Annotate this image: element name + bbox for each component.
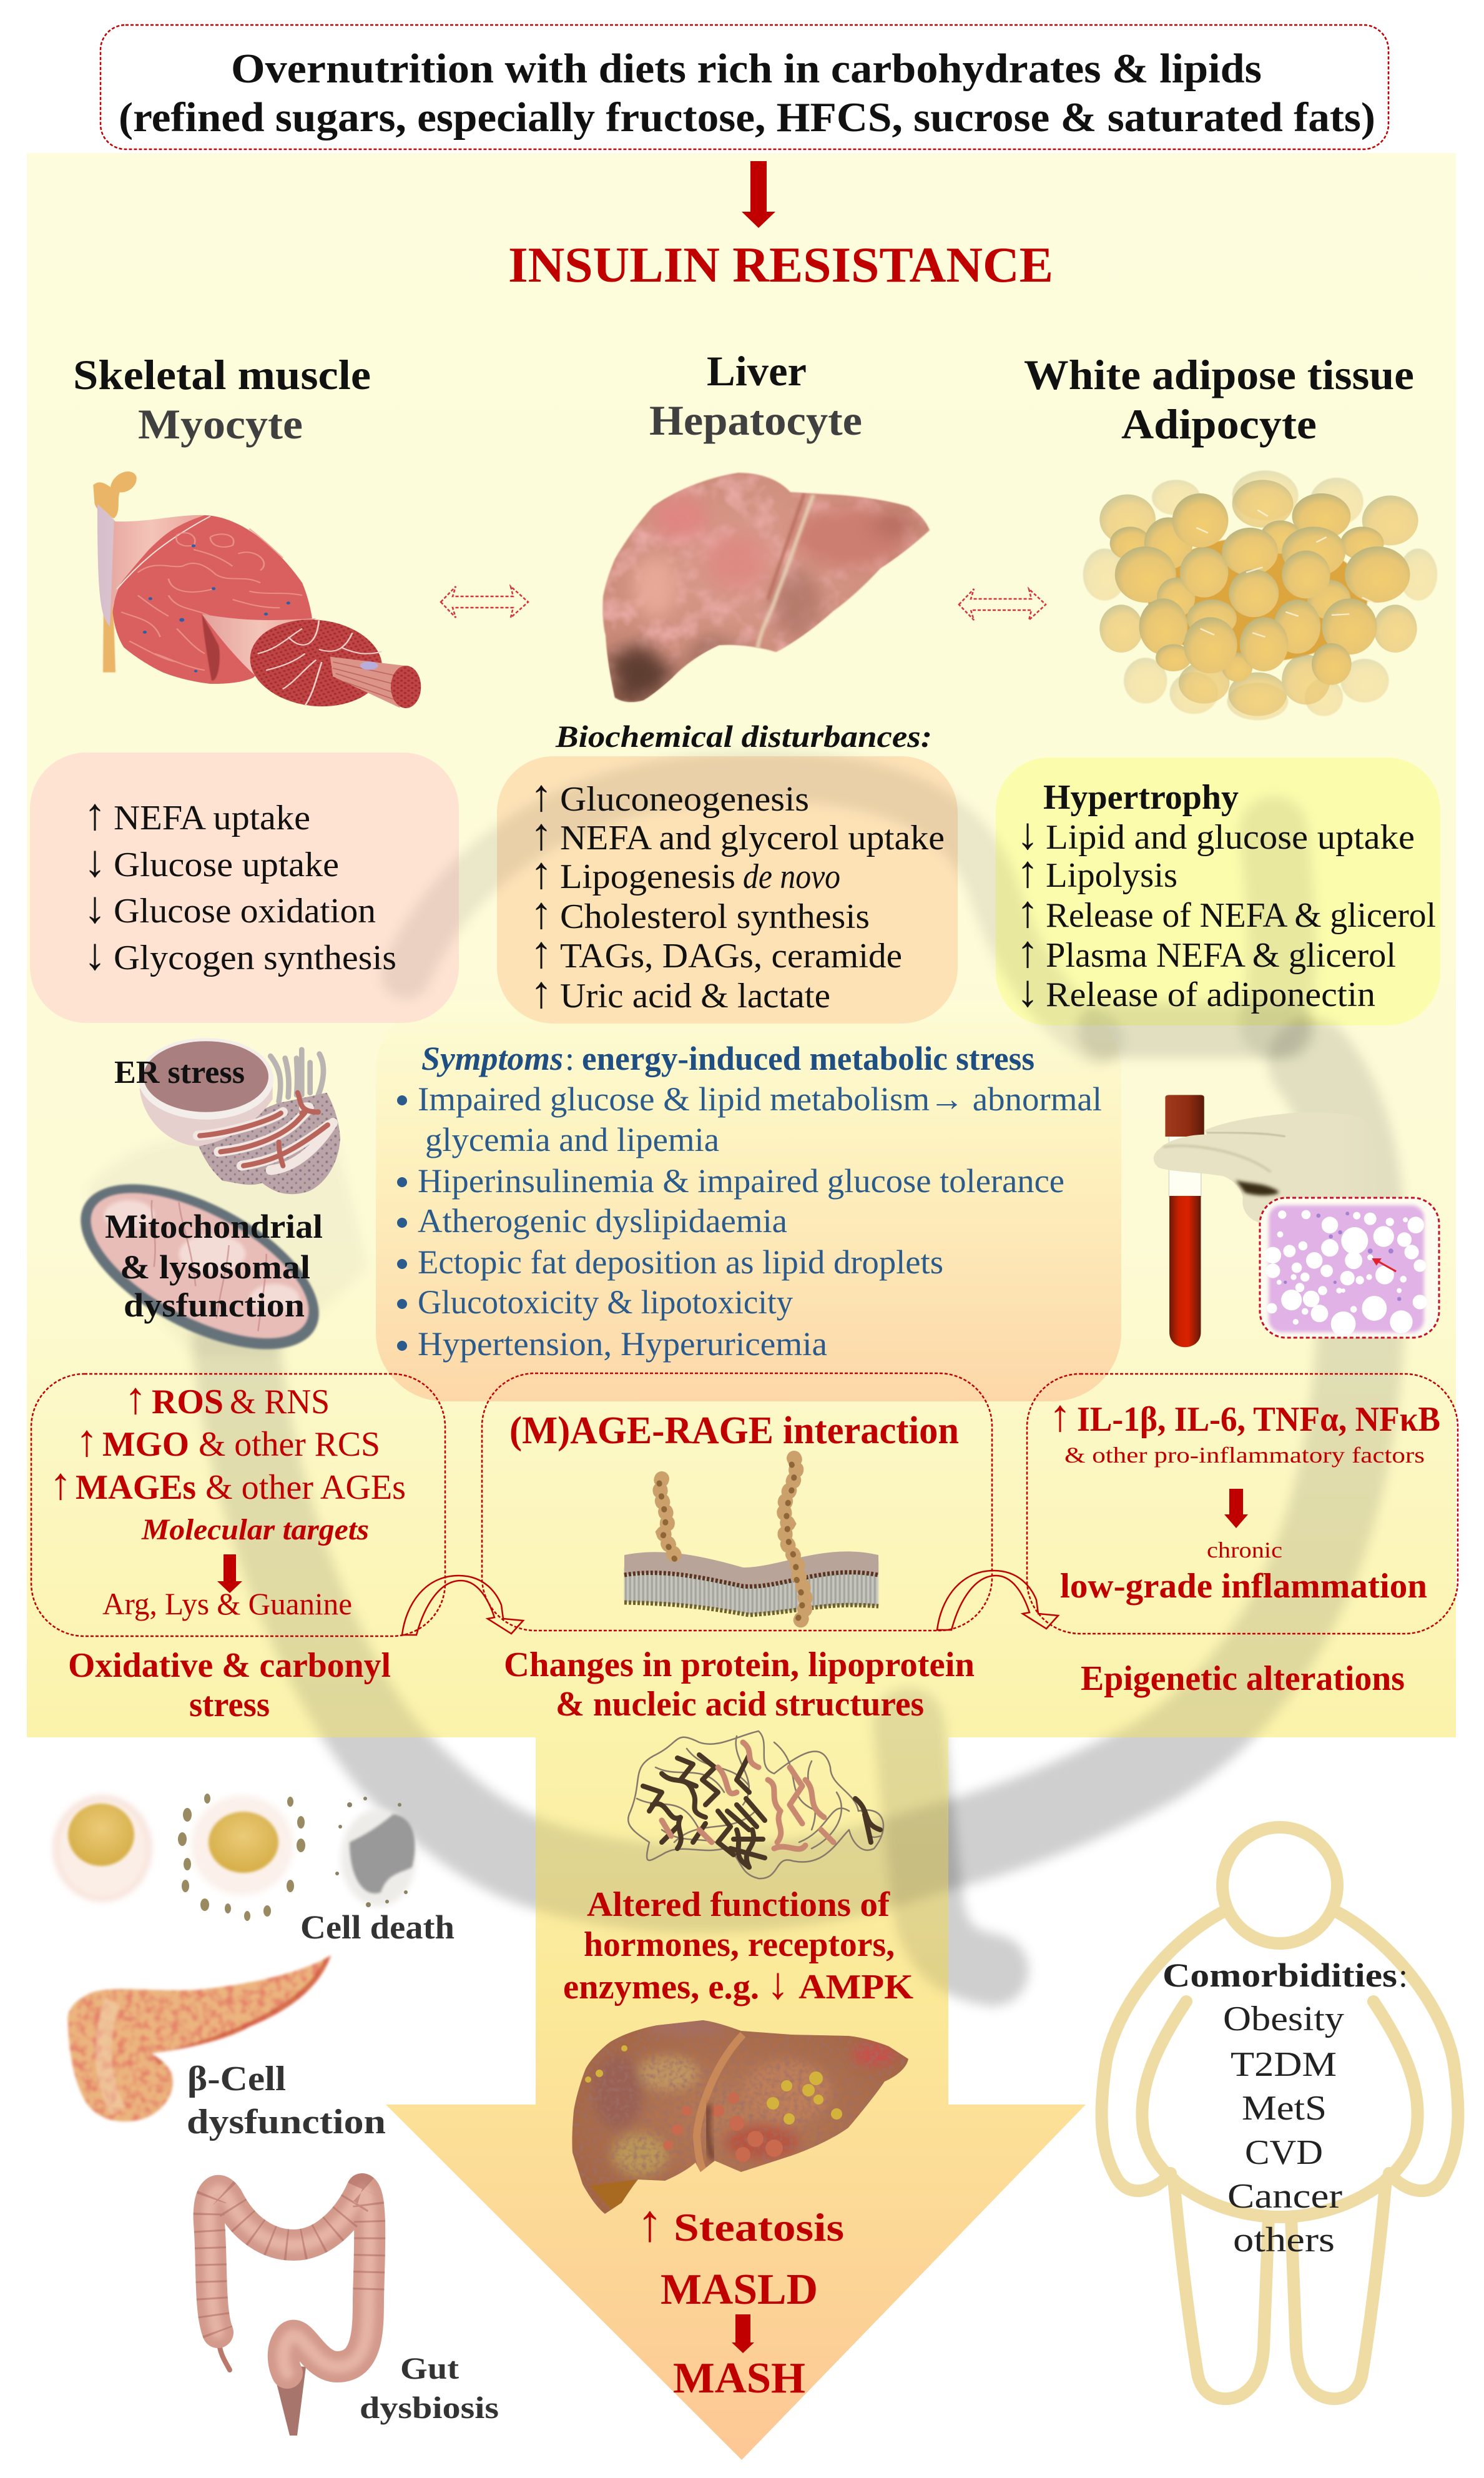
icon: protein structure	[628, 1731, 883, 1878]
title: insulin resistance: INSULIN RESISTANCE	[508, 238, 1053, 293]
label: gut dysbiosis: dysbiosis	[360, 2390, 499, 2425]
text: altered functions	[563, 1885, 913, 2008]
heading: symptoms: energy-induced metabolic stress	[582, 1040, 1034, 1077]
heading: skeletal muscle: Skeletal muscle	[73, 351, 371, 398]
list: myocyte disturbances: ↓	[84, 929, 106, 979]
label: ER stress: ER stress	[114, 1055, 245, 1090]
label: mitochondrial and lysosomal dysfunction: & lysosomal	[120, 1248, 310, 1286]
panel: inflammation dashed box: & other pro-inflammatory factors	[1064, 1443, 1425, 1468]
text: altered functions: hormones, receptors,	[584, 1925, 895, 1964]
list: myocyte disturbances: Glucose uptake	[114, 846, 339, 884]
label: gut dysbiosis	[360, 2351, 499, 2425]
list: adipocyte disturbances: Lipolysis	[1046, 856, 1177, 895]
icon: healthy liver	[599, 468, 936, 706]
watermark: grey stethoscope shape outside panel	[316, 1737, 1261, 2011]
list: hepatocyte disturbances	[530, 771, 945, 1017]
label: mitochondrial and lysosomal dysfunction: Mitochondrial	[105, 1208, 323, 1245]
list: symptoms: glycemia and lipemia	[425, 1121, 719, 1158]
panel: AGE-RAGE dashed box: (M)AGE-RAGE interaction	[509, 1409, 959, 1452]
list: adipocyte disturbances: Lipid and glucose uptake	[1046, 818, 1415, 857]
list: hepatocyte disturbances: ↑	[530, 771, 553, 821]
panel: inflammation dashed box: chronic	[1207, 1538, 1282, 1562]
arrow: overnutrition to insulin resistance	[742, 161, 775, 228]
list: comorbidities: Comorbidities	[1162, 1957, 1397, 1994]
text: altered functions: Altered functions of	[587, 1885, 890, 1924]
list: comorbidities: :	[1398, 1957, 1408, 1994]
icon: human body outline	[1102, 1827, 1458, 2399]
list: comorbidities: CVD	[1245, 2133, 1323, 2172]
heading: symptoms: :	[565, 1040, 574, 1077]
header box: overnutrition: Overnutrition with diets rich in carbohydrates & lipids	[231, 46, 1262, 92]
panel: inflammation dashed box: IL-1β, IL-6, TNFα, NFκB	[1077, 1400, 1440, 1439]
list: hepatocyte disturbances: ↑	[530, 848, 553, 898]
panel: oxidative stress dashed box: ↑	[124, 1373, 147, 1423]
list: comorbidities	[1162, 1957, 1408, 2259]
list: symptoms: Glucotoxicity & lipotoxicity	[418, 1283, 793, 1321]
icon: membrane with receptor	[624, 1458, 878, 1627]
text: altered functions: enzymes, e.g.	[563, 1968, 759, 2007]
icon: pancreas	[62, 1952, 334, 2126]
text: epigenetic alterations: Epigenetic alterations	[1081, 1659, 1405, 1698]
heading: liver	[649, 347, 862, 444]
label: mitochondrial and lysosomal dysfunction: dysfunction	[124, 1286, 305, 1324]
list: adipocyte disturbances: Hypertrophy	[1043, 778, 1239, 817]
text: altered functions: ↓	[767, 1958, 789, 2008]
text: oxidative and carbonyl stress: Oxidative & carbonyl	[68, 1646, 391, 1685]
list: myocyte disturbances: NEFA uptake	[114, 799, 310, 837]
list: myocyte disturbances	[84, 789, 396, 979]
list: symptoms: Hiperinsulinemia & impaired glucose tolerance	[418, 1162, 1064, 1200]
list: hepatocyte disturbances: de novo	[743, 857, 840, 896]
heading: liver: Liver	[707, 347, 807, 395]
panel: oxidative stress dashed box: & RNS	[230, 1383, 330, 1421]
arrow: curved link oxidative to AGE-RAGE	[402, 1576, 523, 1635]
list: comorbidities: T2DM	[1231, 2045, 1337, 2084]
watermark: grey stethoscope shape inside panel	[87, 776, 1362, 1970]
panel: biochemical disturbances, myocyte	[30, 753, 459, 1023]
list: adipocyte disturbances: ↑	[1016, 847, 1039, 897]
icon: skeletal muscle cross-section	[93, 471, 421, 719]
list: adipocyte disturbances	[1016, 778, 1436, 1016]
list: comorbidities: others	[1233, 2221, 1335, 2259]
panel: oxidative stress dashed box: MAGEs	[76, 1468, 196, 1507]
panel: oxidative stress dashed box: ROS	[152, 1383, 224, 1421]
list: adipocyte disturbances: ↓	[1016, 966, 1039, 1016]
list: adipocyte disturbances: Plasma NEFA & glicerol	[1046, 936, 1396, 975]
list: comorbidities: MetS	[1242, 2089, 1327, 2128]
list: symptoms	[397, 1040, 1102, 1363]
icon: colon	[209, 2189, 370, 2436]
label: beta-cell dysfunction	[187, 2060, 386, 2141]
list: hepatocyte disturbances: ↑	[530, 888, 553, 938]
icon: steatosis histology	[1260, 1198, 1439, 1338]
panel: oxidative stress dashed box: Molecular targets	[141, 1513, 369, 1546]
list: symptoms: Ectopic fat deposition as lipid droplets	[418, 1243, 943, 1281]
list: myocyte disturbances: ↓	[84, 882, 106, 932]
panel: AGE-RAGE dashed box	[482, 1373, 992, 1631]
list: symptoms: Atherogenic dyslipidaemia	[418, 1202, 787, 1240]
icon: double arrow liver to adipose	[959, 589, 1046, 620]
text: steatosis: ↑	[637, 2194, 663, 2253]
list: adipocyte disturbances: ↑	[1016, 887, 1039, 937]
label: gut dysbiosis: Gut	[400, 2351, 459, 2386]
heading: skeletal muscle	[73, 351, 371, 448]
text: structural changes: & nucleic acid structures	[556, 1685, 924, 1724]
list: symptoms: Impaired glucose & lipid metabolism→ abnormal	[418, 1080, 1102, 1118]
label: beta-cell dysfunction: dysfunction	[187, 2103, 386, 2141]
text: MASLD: MASLD	[661, 2266, 818, 2314]
text: altered functions: AMPK	[799, 1968, 913, 2007]
list: myocyte disturbances: ↓	[84, 836, 106, 886]
icon: endoplasmic reticulum and Golgi	[139, 1038, 340, 1194]
panel: oxidative stress dashed box: & other RCS	[199, 1425, 380, 1464]
header box: overnutrition	[101, 25, 1388, 149]
list: myocyte disturbances: Glycogen synthesis	[114, 939, 396, 977]
label: mitochondrial and lysosomal dysfunction	[105, 1208, 323, 1324]
panel: oxidative stress dashed box: Arg, Lys & Guanine	[102, 1586, 352, 1621]
list: hepatocyte disturbances: ↑	[530, 927, 553, 977]
list: adipocyte disturbances: ↑	[1016, 927, 1039, 977]
list: myocyte disturbances: Glucose oxidation	[114, 892, 376, 930]
panel: oxidative stress dashed box: MGO	[102, 1425, 189, 1464]
panel: biochemical disturbances, hepatocyte	[497, 756, 958, 1024]
icon: adipocytes cluster	[1083, 470, 1437, 720]
arrow: MASLD to MASH	[732, 2314, 754, 2353]
label: cell death: Cell death	[300, 1908, 455, 1946]
list: hepatocyte disturbances: NEFA and glycerol uptake	[560, 819, 945, 857]
list: hepatocyte disturbances: ↑	[530, 967, 553, 1017]
panel: oxidative stress dashed box: ↑	[49, 1459, 72, 1509]
heading: symptoms: Symptoms	[421, 1040, 563, 1077]
list: hepatocyte disturbances: Gluconeogenesis	[560, 780, 809, 819]
text: structural changes: Changes in protein, lipoprotein	[504, 1646, 975, 1684]
panel: oxidative stress dashed box: & other AGEs	[205, 1468, 406, 1507]
arrow: curved link AGE-RAGE to inflammation	[937, 1571, 1058, 1630]
heading: white adipose tissue: Adipocyte	[1121, 400, 1317, 448]
list: adipocyte disturbances: Release of adiponectin	[1046, 975, 1375, 1014]
heading: liver: Hepatocyte	[649, 397, 862, 444]
icon: dying cells	[55, 1794, 416, 1921]
panel: inflammation dashed box: low-grade inflammation	[1060, 1567, 1427, 1606]
text: steatosis	[637, 2194, 844, 2253]
panel: inflammation dashed box	[1027, 1374, 1458, 1634]
icon: gloved hand holding blood tube	[1154, 1095, 1378, 1347]
arrow: inflammation	[1224, 1489, 1248, 1528]
label: beta-cell dysfunction: β-Cell	[187, 2060, 286, 2098]
text: structural changes	[504, 1646, 975, 1724]
panel: oxidative stress dashed box: ↑	[76, 1416, 98, 1466]
list: comorbidities: Cancer	[1227, 2177, 1342, 2216]
icon: double arrow muscle to liver	[441, 586, 528, 618]
list: hepatocyte disturbances: ↑	[530, 809, 553, 859]
list: hepatocyte disturbances: TAGs, DAGs, ceramide	[560, 937, 902, 975]
list: adipocyte disturbances: ↓	[1016, 809, 1039, 859]
icon: fatty liver	[568, 2017, 912, 2217]
panel: inflammation dashed box: ↑	[1049, 1391, 1071, 1441]
icon: mitochondrion	[56, 1150, 343, 1383]
text: MASH: MASH	[673, 2354, 805, 2402]
text: oxidative and carbonyl stress: stress	[189, 1686, 270, 1724]
list: comorbidities: Obesity	[1223, 2000, 1344, 2038]
list: symptoms: Hypertension, Hyperuricemia	[418, 1325, 827, 1363]
heading: white adipose tissue: White adipose tissue	[1024, 351, 1414, 398]
text: steatosis: Steatosis	[674, 2205, 844, 2249]
heading: white adipose tissue	[1024, 351, 1414, 448]
panel: symptoms background	[376, 1002, 1121, 1401]
text: biochemical disturbances: Biochemical disturbances:	[555, 719, 932, 754]
list: hepatocyte disturbances: Cholesterol synthesis	[560, 897, 870, 936]
header box: overnutrition: (refined sugars, especially fructose, HFCS, sucrose & saturated fats)	[119, 94, 1375, 141]
panel: biochemical disturbances, adipocyte	[996, 758, 1440, 1025]
list: adipocyte disturbances: Release of NEFA & glicerol	[1046, 896, 1436, 935]
panel: oxidative stress dashed box	[31, 1373, 445, 1636]
arrow: molecular targets	[217, 1554, 242, 1593]
list: hepatocyte disturbances: Uric acid & lactate	[560, 977, 830, 1015]
list: myocyte disturbances: ↑	[84, 789, 106, 839]
text: oxidative and carbonyl stress	[68, 1646, 391, 1724]
list: hepatocyte disturbances: Lipogenesis	[560, 857, 735, 896]
heading: skeletal muscle: Myocyte	[138, 400, 303, 448]
